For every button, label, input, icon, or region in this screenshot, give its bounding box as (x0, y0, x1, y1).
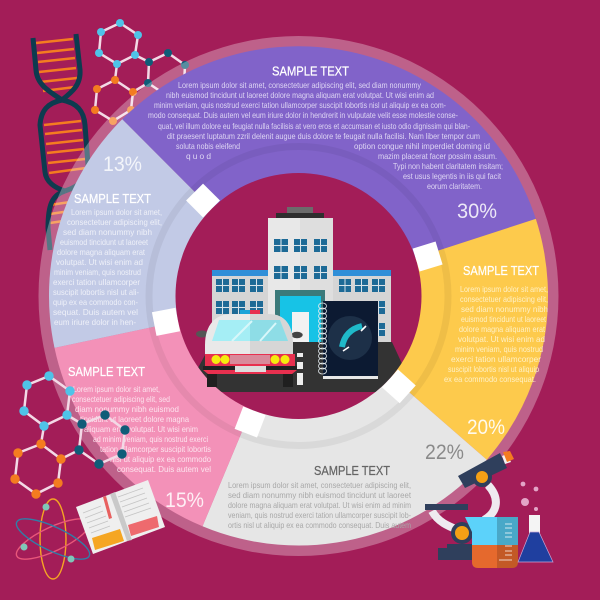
body: gray: sed diam nonummy nibh euismod tincidunt ut laoreet (228, 490, 412, 500)
body: gray: Lorem ipsum dolor sit amet, consectetuer adipiscing elit, (228, 480, 411, 490)
icon: flask and bubbles (518, 482, 553, 562)
body: purple: est usus legentis in iis qui facit (403, 171, 502, 181)
body: purple: modo consequat. Duis autem vel eum iriure dolor in hendrerit in vulputate velit esse molestie conse- (148, 110, 458, 120)
body: purple: soluta nobis eleifend (176, 141, 240, 151)
body: purple: option congue nihil imperdiet doming id (354, 141, 490, 151)
body: yellow: dolore magna aliquam erat (459, 324, 546, 334)
slice: lavender 13% (49, 119, 298, 348)
heading: yellow: SAMPLE TEXT (463, 263, 539, 278)
body: purple: minim veniam, quis nostrud exerci tation ullamcorper suscipit lobortis nisl ut aliquip ex ea com- (154, 100, 446, 110)
icon: lower molecule (10, 371, 130, 499)
phone book (318, 301, 378, 379)
icon: microscope (425, 451, 514, 560)
slice: yellow 20% (298, 219, 548, 460)
body: lavender: volutpat. Ut wisi enim ad (56, 257, 143, 267)
body: pink: aliquam erat volutpat. Ut wisi enim (84, 424, 198, 434)
body: gray: dolore magna aliquam erat volutpat. Ut wisi enim ad minim (228, 500, 411, 510)
value: 20%: 20% (467, 416, 505, 439)
center hole (176, 173, 422, 419)
body: yellow (444, 284, 548, 384)
body: pink: ad minim veniam, quis nostrud exerci (93, 434, 208, 444)
body: yellow: minim veniam, quis nostrud (455, 344, 543, 354)
body: lavender: minim veniam, quis nostrud (54, 267, 141, 277)
body: purple (148, 80, 503, 191)
lane markings (297, 353, 303, 385)
body: purple: nibh euismod tincidunt ut laoreet dolore magna aliquam erat volutpat. Ut wisi enim ad (166, 90, 434, 100)
value: 13%: 13% (103, 153, 142, 176)
body: pink (72, 384, 211, 474)
heading: purple: SAMPLE TEXT (272, 64, 349, 78)
body: pink: tation ullamcorper suscipit lobortis (100, 444, 211, 454)
value: 15%: 15% (165, 489, 204, 512)
body: yellow: consectetuer adipiscing elit, (460, 294, 548, 304)
body: yellow: euismod tincidunt ut laoreet (461, 314, 547, 324)
body: lavender: exerci tation ullamcorper (53, 277, 140, 287)
icon: upper molecule (91, 19, 189, 125)
body: lavender: Lorem ipsum dolor sit amet, (71, 207, 162, 217)
icon: hospital scene (196, 207, 402, 392)
body: yellow: exerci tation ullamcorper (451, 354, 541, 364)
body: purple: Typi non habent claritatem insitam; (393, 161, 503, 171)
body: purple: eorum claritatem. (427, 181, 482, 191)
body: yellow: suscipit lobortis nisl ut aliquip (448, 364, 539, 374)
body: lavender: dolore magna aliquam erat (57, 247, 146, 257)
hospital building (212, 207, 391, 342)
slice: pink 15% (54, 296, 298, 526)
road (198, 342, 402, 392)
value: 22%: 22% (425, 441, 464, 464)
body: lavender: sequat. Duis autem vel (53, 307, 138, 317)
body: lavender: quip ex ea commodo con- (53, 297, 138, 307)
body: pink: Lorem ipsum dolor sit amet, (73, 384, 160, 394)
body: purple: dit praesent luptatum zzril delenit augue duis dolore te feugait nulla facilisi. Nam liber tempor cum (167, 131, 480, 141)
white segment markers (152, 184, 443, 438)
text block: pink section (68, 364, 211, 512)
body: purple: q u o d (186, 151, 211, 161)
body: lavender: consectetuer adipiscing elit, (67, 217, 162, 227)
body: pink: diam nonummy nibh euismod (75, 404, 179, 414)
body: lavender: euismod tincidunt ut laoreet (60, 237, 149, 247)
body: purple: mazim placerat facer possim assum. (378, 151, 497, 161)
body: yellow: sed diam nonummy nibh (461, 304, 548, 314)
heading: lavender: SAMPLE TEXT (74, 191, 151, 206)
icon: beaker (465, 517, 518, 568)
body: lavender (53, 207, 162, 327)
body: yellow: Lorem ipsum dolor sit amet, (460, 284, 548, 294)
icon: atom (12, 499, 94, 579)
outer translucent ring (38, 36, 558, 556)
value: 30%: 30% (457, 200, 497, 223)
police car (196, 310, 303, 387)
text block: yellow section (444, 263, 548, 439)
text block: lavender section (53, 153, 162, 327)
text block: purple section (148, 64, 503, 223)
body: yellow: ex ea commodo consequat. (444, 374, 536, 384)
body: pink: tincidunt ut laoreet dolore magna (80, 414, 189, 424)
heading: gray: SAMPLE TEXT (314, 463, 390, 478)
slice: gray 22% (202, 296, 487, 546)
body: pink: consectetuer adipiscing elit, sed (72, 394, 170, 404)
heading: pink: SAMPLE TEXT (68, 364, 145, 379)
body: pink: nisl ut aliquip ex ea commodo (110, 454, 211, 464)
body: purple: quat, vel illum dolore eu feugiat nulla facilisis at vero eros et accumsan et iusto odio dignissim qui blan- (158, 121, 470, 131)
body: lavender: eum iriure dolor in hen- (54, 317, 136, 327)
body: gray (228, 480, 412, 530)
icon: open book (76, 480, 165, 554)
body: lavender: sed diam nonummy nibh (63, 227, 152, 237)
body: purple: Lorem ipsum dolor sit amet, consectetuer adipiscing elit, sed diam nonummy (178, 80, 422, 90)
donut chart (49, 46, 548, 546)
body: lavender: suscipit lobortis nisl ut ali- (53, 287, 139, 297)
body: gray: veniam, quis nostrud exerci tation ullamcorper suscipit lob- (228, 510, 411, 520)
inner shade band (149, 146, 448, 446)
body: pink: consequat. Duis autem vel (117, 464, 211, 474)
body: yellow: volutpat. Ut wisi enim ad (458, 334, 545, 344)
body: gray: ortis nisl ut aliquip ex ea commodo consequat. Duis autem (228, 520, 411, 530)
slice: purple 30% (122, 46, 536, 296)
text block: gray section (228, 441, 464, 530)
icon: DNA helix (33, 34, 88, 250)
